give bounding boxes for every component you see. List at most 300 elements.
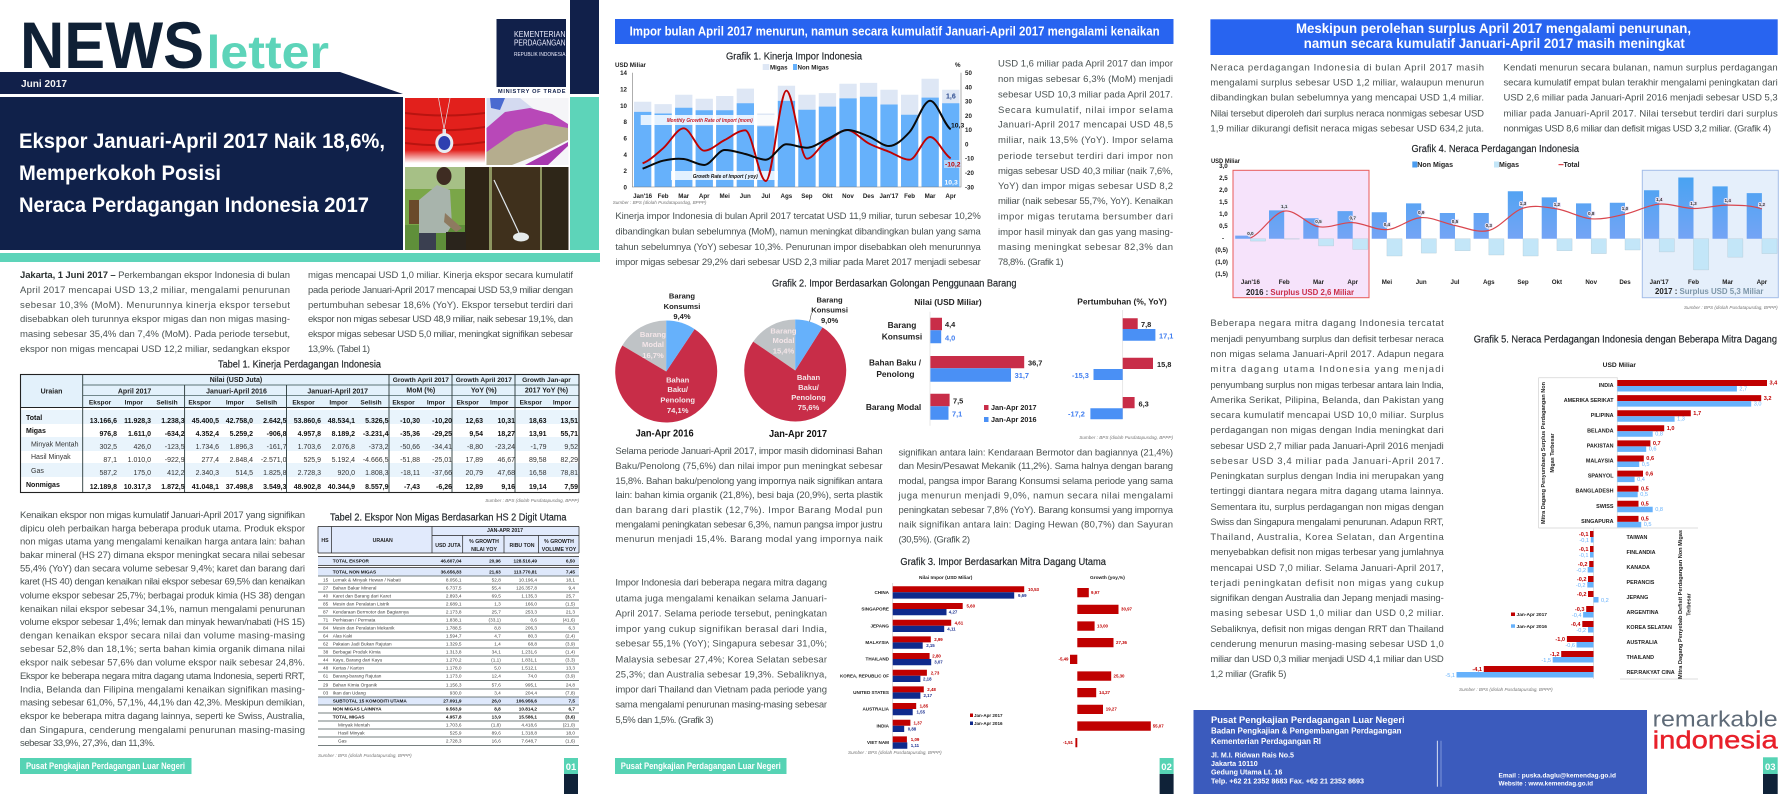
table 1 data rows: 19,14 xyxy=(529,484,547,491)
table 2 header cells: NILAI YOY xyxy=(471,547,497,553)
surplus axis title (rotated): Migas Terbesar xyxy=(1550,433,1556,473)
deficit value labels: -1,0 xyxy=(1555,637,1565,643)
chart 4 axes and legend: (1,5) xyxy=(1215,271,1228,278)
table 2 data rows: 995,1 xyxy=(525,683,537,688)
intro text columns: migas mencapai USD 1,0 miliar. Kinerja ekspor secara kumulatif xyxy=(308,270,573,281)
table 1 data rows: 5.259,2 xyxy=(230,431,253,438)
deficit value labels: -0,2 xyxy=(1576,628,1586,634)
table 2 data rows: TOTAL EKSPOR xyxy=(333,559,370,564)
chart 1 value labels: 1,6 xyxy=(946,94,956,100)
table 1 header cells: Ekspor xyxy=(188,400,211,406)
table 1 data rows: Hasil Minyak xyxy=(31,454,71,461)
contact footer panel: Pusat Pengkajian Perdagangan Luar Negeri xyxy=(1211,715,1405,726)
table 1 data rows: -51,88 xyxy=(400,457,420,464)
table 1 data rows: 12,89 xyxy=(465,484,483,491)
table 2 data rows: 44 xyxy=(323,658,329,663)
table 2 header cells: VOLUME YOY xyxy=(542,547,577,553)
remarkable indonesia logo xyxy=(1653,707,1778,755)
table 1 data rows: 17,89 xyxy=(465,457,483,464)
chart 3 country labels: JEPANG xyxy=(870,623,889,628)
table 1 data rows: 12,63 xyxy=(465,418,483,425)
table 2 data rows: 40 xyxy=(323,594,329,599)
chart 3: partners growth: 14,27 xyxy=(1099,690,1111,695)
export analysis paragraph: masing sebesar 61,0%, 57,1%, 44,1% dan 42,3%. Meskipun demikian, xyxy=(20,698,305,709)
pie chart: Jan-Apr 2017: 9,0% xyxy=(821,316,839,325)
table 2 data rows: (3,9) xyxy=(565,642,575,647)
table 1 data rows: 13,91 xyxy=(529,431,547,438)
table 2: ekspor non migas xyxy=(318,526,579,746)
chart 3 value labels: 9,69 xyxy=(1018,593,1027,598)
chart 1 axes and legend: Des xyxy=(863,193,875,200)
table 1 data rows: 1.808,3 xyxy=(365,470,389,477)
trading partner text: miliar dan USD 0,3 miliar menjadi USD 4,1 miliar dan USD xyxy=(1210,654,1444,665)
table 2 data rows: Hasil Minyak xyxy=(338,731,365,736)
page number 01: 01 xyxy=(566,762,577,773)
export analysis paragraph: kenaikan nilai ekspor sebesar 34,1%, namun mengalami penurunan xyxy=(20,604,305,615)
chart 1 source: Sumber : BPS (diolah Pusdatapusdag, BPPP) xyxy=(613,200,707,205)
chart 3 value labels: 2,15 xyxy=(926,643,935,648)
table 2 data rows: Bahan Bakar Mineral xyxy=(333,586,376,591)
trading partner text: mencapai USD 7,0 miliar. Selama Januari-April 2017, xyxy=(1210,563,1444,574)
headline banner xyxy=(0,97,403,250)
chart 5 legend: Jan-Apr 2017 xyxy=(1516,612,1547,617)
chart 3 country labels: KOREA, REPUBLIC OF xyxy=(840,673,889,678)
table 2 data rows: 930,0 xyxy=(450,691,462,696)
chart 1 axes and legend: USD Miliar xyxy=(615,62,647,69)
contact footer panel: Jakarta 10110 xyxy=(1211,761,1258,768)
chart 4: neraca perdagangan xyxy=(1211,144,1778,298)
chart 2 source: Sumber : BPS (diolah Pusdatapusdag, BPPP) xyxy=(1079,435,1173,440)
table 1 data rows: 514,5 xyxy=(235,470,253,477)
export analysis paragraph xyxy=(20,510,305,749)
chart 3 value labels: 2,73 xyxy=(931,670,940,675)
bar chart: pertumbuhan YoY: 17,1 xyxy=(1159,332,1173,340)
table 1 data rows: Migas xyxy=(26,428,46,435)
chart 3 value labels: 1,37 xyxy=(914,720,923,725)
table 2 data rows: NON MIGAS LAINNYA xyxy=(333,707,382,712)
chart 1 axes and legend: Feb xyxy=(904,193,915,200)
chart 4 axes and legend: Non Migas xyxy=(1417,162,1453,169)
deficit country labels: TAIWAN xyxy=(1626,535,1647,541)
chart 3 value labels xyxy=(908,587,1040,748)
2016 surplus caption: 2016 : Surplus USD 2,6 Miliar xyxy=(1246,287,1355,297)
surplus value labels: 0,6 xyxy=(1646,456,1654,462)
surplus value labels: 1,3 xyxy=(1677,416,1685,422)
newsletter wordmark xyxy=(20,8,329,82)
table 1 data rows: 2.848,4 xyxy=(230,457,253,464)
table 2 data rows: 9,4 xyxy=(568,586,575,591)
page 2 import text right: non migas sebesar 6,3% (MoM) menjadi xyxy=(998,74,1173,85)
table 1 header cells: Impor xyxy=(226,400,245,406)
partner text: impor yang cukup signifikan berasal dari India, xyxy=(615,624,827,635)
trading partner text: sebesar USD 3,4 miliar pada Januari-April 2017. xyxy=(1210,456,1444,467)
chart 1 axes and legend: 50 xyxy=(965,70,972,77)
table 1 data rows: 3.549,3 xyxy=(263,484,287,491)
surplus axis title (rotated) xyxy=(1541,382,1556,524)
table 1 data rows: 1.238,3 xyxy=(161,418,185,425)
surplus value labels: 0,7 xyxy=(1653,441,1661,447)
table 1 data rows: 412,2 xyxy=(167,470,185,477)
page 2 import text right: Januari-April 2017 mencapai USD 48,5 xyxy=(998,120,1173,131)
table 1 header cells: Impor xyxy=(329,400,348,406)
trading partner text xyxy=(1210,318,1445,680)
chart 1 axes and legend: 4 xyxy=(624,152,628,159)
surplus value labels: 0,5 xyxy=(1641,502,1649,508)
table 1 data rows: -6,26 xyxy=(436,484,452,491)
table 2 data rows: 10.814,2 xyxy=(519,707,537,712)
table 1 header cells: Januari-April 2016 xyxy=(206,388,267,396)
trading partner text: signifikan dengan Australia dan Jepang menjadi masing- xyxy=(1210,593,1444,604)
table 2 data rows: 25,7 xyxy=(492,610,501,615)
table 1 data rows: 18,63 xyxy=(529,418,547,425)
trading partner text: Sementara itu, surplus perdagangan non migas dengan xyxy=(1210,502,1444,513)
deficit country labels: ARGENTINA xyxy=(1626,610,1659,616)
red line: mom growth xyxy=(643,91,951,181)
deficit value labels: -0,3 xyxy=(1575,607,1584,613)
surplus text columns: dibandingkan bulan sebelumnya yang mencapai USD 1,4 miliar. xyxy=(1210,93,1484,104)
table 1 header cells: Selisih xyxy=(256,400,277,406)
table 2 header cells: USD JUTA xyxy=(435,543,461,549)
import by use text: dan Mesin/Pesawat Mekanik (11,2%). Sama halnya dengan barang xyxy=(898,461,1173,472)
chart 3 country labels: THAILAND xyxy=(866,657,890,662)
table 2 data rows: 7.648,7 xyxy=(521,739,537,744)
chart 4 axes and legend: Ags xyxy=(1483,279,1495,286)
table 1 data rows: -373,2 xyxy=(369,444,389,451)
table 1 data rows: -23,24 xyxy=(495,444,515,451)
page number 02 xyxy=(1160,758,1174,794)
bar chart: nilai USD miliar: Bahan Baku / xyxy=(869,358,922,368)
table 1 data rows: 78,81 xyxy=(560,470,578,477)
chart 4 axes and legend: Mar xyxy=(1313,279,1325,286)
pie chart: Jan-Apr 2017: Konsumsi xyxy=(811,306,848,314)
pie chart: Jan-Apr 2016: Jan-Apr 2016 xyxy=(636,428,694,440)
bar chart: nilai USD miliar: 4,4 xyxy=(945,320,956,329)
chart 3 legend: Jan-Apr 2016 xyxy=(974,721,1003,726)
trading partner text: mitra dagang utama Indonesia yang menjadi xyxy=(1210,364,1444,375)
table 2 data rows: Kendaraan Bermotor dan Bagiannya xyxy=(333,610,409,615)
2017 surplus caption: 2017 : Surplus USD 5,3 Miliar xyxy=(1655,286,1764,296)
total value labels: 0,5 xyxy=(1452,219,1459,224)
chart 4 axes and legend: Feb xyxy=(1688,279,1699,286)
chart 1 axes and legend: Apr xyxy=(945,193,957,200)
table 2 data rows: 1.231,6 xyxy=(521,650,537,655)
intro text columns: pada periode Januari-April 2017 mencapai USD 53,9 miliar dengan xyxy=(308,285,573,296)
partner text: 5,5% dan 1,5%. (Grafik 3) xyxy=(615,715,713,726)
total value labels: 0,9 xyxy=(1418,210,1425,215)
import by use text: menurun menjadi 15,4%. Barang modal yang impornya naik xyxy=(615,534,883,545)
surplus country labels: PILIPINA xyxy=(1591,413,1614,419)
page 2 import text right: YoY) dan impor migas sebesar USD 8,2 xyxy=(998,181,1173,192)
chart 1 axes and legend: Mei xyxy=(720,193,730,200)
table 2 data rows: 85 xyxy=(323,602,329,607)
table 1 data rows: 1.825,8 xyxy=(263,470,287,477)
bar chart: nilai USD miliar: Konsumsi xyxy=(882,331,922,341)
pie chart: Jan-Apr 2017: Penolong xyxy=(791,393,826,402)
bar chart: nilai USD miliar: Barang Modal xyxy=(866,402,921,412)
contact footer panel: Jl. M.I. Ridwan Rais No.5 xyxy=(1211,752,1294,760)
page number 03: 03 xyxy=(1765,762,1776,773)
chart 3 value labels: 2,80 xyxy=(932,654,941,659)
table 2 data rows: 1.594,7 xyxy=(446,634,462,639)
partner text: sebesar 55,1% (YoY); Singapura sebesar 31,0%; xyxy=(615,639,827,650)
table 1 header cells: Uraian xyxy=(41,388,62,396)
trading partner text: terjadi peningkatan defisit non migas yang cukup xyxy=(1210,578,1444,589)
table 1 header cells: Ekspor xyxy=(392,400,415,406)
trading partner text: cenderung menurun masing-masing sebesar USD 1,0 xyxy=(1210,639,1444,650)
page 2 import text left xyxy=(615,211,982,268)
export analysis paragraph: non migas utama yang mengalami kenaikan harga antara lain: bahan xyxy=(20,537,305,548)
pie chart: Jan-Apr 2017: Bahan xyxy=(797,373,820,382)
bar chart legend: Jan-Apr 2017 xyxy=(991,405,1037,412)
table 1 data rows: 8.557,9 xyxy=(365,484,389,491)
page 2 footer tag xyxy=(615,758,786,774)
chart 3 country labels: CHINA xyxy=(874,590,890,595)
table 1 data rows: 2.340,3 xyxy=(196,470,219,477)
surplus value labels: 1,0 xyxy=(1667,426,1674,432)
table 2 data rows: 525,9 xyxy=(450,731,462,736)
table 1 data rows: 89,58 xyxy=(529,457,547,464)
chart 3 value labels: 1,11 xyxy=(911,743,920,748)
table 2 data rows: 52,8 xyxy=(492,578,501,583)
chart 1 axes and legend: Jan'16 xyxy=(633,193,653,200)
table 2 data rows: (1,5) xyxy=(565,602,575,607)
table 2 data rows: 55,4 xyxy=(492,586,501,591)
table 2 data rows: Bahan Kimia Organik xyxy=(333,683,378,688)
bar chart: nilai USD miliar xyxy=(866,297,1042,426)
migas bars xyxy=(1250,239,1777,270)
intro text columns: ekspor non migas mencapai USD 12,2 miliar, sedangkan ekspor xyxy=(20,344,290,355)
contact footer panel: Website : www.kemendag.go.id xyxy=(1498,780,1593,788)
table 1 data rows: 9,52 xyxy=(564,444,578,451)
table 1 data rows: -2.571,0 xyxy=(261,457,287,464)
table 1 data rows: 1.896,3 xyxy=(230,444,253,451)
table 2 data rows: (7,8) xyxy=(565,691,575,696)
chart 5: surplus partners xyxy=(1538,362,1778,528)
total value labels: 0,5 xyxy=(1315,219,1322,224)
chart 1 axes and legend: -20 xyxy=(965,170,975,177)
surplus text columns: miliar pada Januari-April 2017. Nilai tersebut terdiri dari surplus xyxy=(1504,109,1778,120)
chart 1 axes and legend: -30 xyxy=(965,184,975,191)
chart 1: kinerja impor xyxy=(615,52,975,200)
bar chart: nilai USD miliar: 7,1 xyxy=(952,410,962,418)
chart 3: partners growth: 9,97 xyxy=(1091,590,1100,595)
trading partner text: masing sebesar USD 1,0 miliar dan USD 0,2 miliar. xyxy=(1210,608,1444,619)
table 2 data rows: (3,9) xyxy=(565,674,575,679)
deficit value labels: -5,1 xyxy=(1445,673,1455,679)
chart 3 country labels: AUSTRALIA xyxy=(862,707,890,712)
table 1 header cells: Impor xyxy=(553,400,572,406)
total value labels: 0,8 xyxy=(1588,211,1595,216)
total value labels: 1,4 xyxy=(1725,198,1731,203)
table 2 data rows: 46.607,04 xyxy=(441,559,462,564)
table 1 data rows: -161,7 xyxy=(267,444,287,451)
table 1: kinerja perdagangan xyxy=(20,374,579,492)
chart 3 value labels: 3,07 xyxy=(934,660,943,665)
table 1 data rows: 1.611,0 xyxy=(128,431,151,438)
table 2 source: Sumber : BPS (diolah Pusdatapusdag, BPPP) xyxy=(318,753,412,758)
bar chart: nilai USD miliar: Penolong xyxy=(876,369,914,379)
table 2 data rows: 16,6 xyxy=(492,739,501,744)
chart 3 value labels: 1,85 xyxy=(920,704,929,709)
table 2 header cells: URAIAN xyxy=(373,538,393,544)
table 2 data rows: 1.318,8 xyxy=(521,731,537,736)
partner text: April 2017. Selama periode tersebut, peningkatan xyxy=(615,609,827,620)
surplus text columns: Nilai tersebut diperoleh dari surplus neraca nonmigas sebesar USD xyxy=(1210,109,1484,120)
table 2 data rows: 13,9 xyxy=(492,715,501,720)
annotation box: yearly growth xyxy=(671,171,778,180)
chart 3 value labels: 10,53 xyxy=(1028,587,1040,592)
import by use text: 15,8%. Bahan baku/penolong yang impornya naik signifikan antara xyxy=(615,476,883,487)
deficit country labels xyxy=(1626,535,1675,676)
chart 1 axes and legend: 12 xyxy=(620,86,628,94)
page 1 masthead xyxy=(0,0,599,95)
photo: sapphire pendant on red fabric xyxy=(405,98,485,163)
table 1 data rows: -634,2 xyxy=(165,431,185,438)
deficit value labels: 0,2 xyxy=(1601,598,1609,604)
table 1 data rows: Gas xyxy=(31,468,44,475)
ministry logo: KEMENTERIAN xyxy=(514,30,566,39)
chart 3 value labels: 2,18 xyxy=(923,676,932,681)
table 2 data rows: (1,4) xyxy=(565,650,575,655)
table 1 data rows: 4.957,8 xyxy=(298,431,321,438)
chart 3 country labels xyxy=(840,590,890,745)
table 1 data rows: 12.189,8 xyxy=(90,484,117,491)
table 1 header cells: Ekspor xyxy=(292,400,315,406)
bar chart: nilai USD miliar: 4,0 xyxy=(945,334,955,342)
table 1 data rows: 2.642,5 xyxy=(263,418,287,425)
chart 1 axes and legend: 30 xyxy=(965,99,972,106)
table 1 data rows: 175,0 xyxy=(133,470,151,477)
total line xyxy=(1250,204,1762,238)
chart 3: partners growth: Growth (yoy,%) xyxy=(1090,575,1125,581)
table 2 data rows: 1.703,6 xyxy=(446,723,462,728)
total value labels: 1,2 xyxy=(1759,202,1766,207)
table 2 data rows: 2.689,1 xyxy=(446,602,462,607)
chart 1 axes and legend: Mar xyxy=(678,193,690,200)
pie chart: Jan-Apr 2016: Barang xyxy=(669,292,695,300)
table 2 header cells: RIBU TON xyxy=(510,543,535,549)
table 2 data rows: Kayu, Barang dari Kayu xyxy=(333,658,383,663)
surplus value labels: 3,2 xyxy=(1764,396,1771,402)
bar chart: pertumbuhan YoY xyxy=(1068,296,1173,419)
chart 3 country labels: SINGAPORE xyxy=(861,607,889,612)
pie chart: Jan-Apr 2016: 9,4% xyxy=(673,312,691,321)
deficit value labels: -0,2 xyxy=(1576,568,1586,574)
table 2 data rows: 128.516,49 xyxy=(514,559,537,564)
intro text columns: ekspor migas sebesar USD 5,0 miliar, meningkat signifikan sebesar xyxy=(308,329,573,340)
deficit country labels: THAILAND xyxy=(1626,655,1654,661)
page 2 heading: Impor bulan April 2017 menurun, namun secara kumulatif Januari-April 2017 mengalami kenaikan xyxy=(630,24,1160,38)
surplus country labels: SINGAPURA xyxy=(1581,519,1614,525)
page 1 footer tag: Pusat Pengkajian Perdagangan Luar Negeri xyxy=(26,761,185,771)
table 1 header cells: Ekspor xyxy=(520,400,542,406)
table 2 data rows: 204,4 xyxy=(525,691,537,696)
table 2 data rows: 1.173,0 xyxy=(446,674,462,679)
intro text columns: Jakarta, 1 Juni 2017 – Perkembangan ekspor Indonesia di bulan xyxy=(20,270,290,281)
table 2 data rows: 206,3 xyxy=(525,626,537,631)
surplus country labels: INDIA xyxy=(1599,383,1614,389)
chart 1 axes and legend xyxy=(615,62,975,200)
deficit value labels: -0,2 xyxy=(1578,562,1588,568)
table 1 data rows: -50,66 xyxy=(400,444,420,451)
chart 3 country labels: UNITED STATES xyxy=(853,690,889,695)
chart 4 axes and legend: Nov xyxy=(1585,279,1598,286)
page 2 import text left: tahun sebelumnya (YoY) sebesar 10,3%. Penurunan impor disebabkan oleh menurunnya xyxy=(615,242,982,253)
trading partner text: menyebabkan defisit non migas terbesar yang jumlahnya xyxy=(1210,547,1445,558)
deficit country labels: AUSTRALIA xyxy=(1626,640,1658,646)
bar chart: nilai USD miliar: Nilai (USD Miliar) xyxy=(914,297,982,307)
export analysis paragraph: volume ekspor sebesar 1,4%; lemak dan minyak hewan/nabati (HS 15) xyxy=(20,617,305,628)
page number 02: 02 xyxy=(1161,762,1172,773)
pie chart: Jan-Apr 2017: Jan-Apr 2017 xyxy=(769,429,827,440)
surplus text columns: 1,9 miliar dikurangi defisit neraca migas sebesar USD 634,2 juta. xyxy=(1210,124,1484,135)
chart 4 axes and legend: Jul xyxy=(1451,279,1460,286)
table 1 source: Sumber : BPS (diolah Pusdatapusdag, BPPP) xyxy=(485,498,579,503)
trading partner text: sebesar USD 2,7 miliar pada Januari-April 2016 menjadi xyxy=(1210,441,1444,452)
chart 1 axes and legend: Non Migas xyxy=(798,64,829,72)
chart 5 legend xyxy=(1511,612,1547,629)
ministry logo: MINISTRY OF TRADE xyxy=(498,89,566,95)
chart 4 axes and legend: Okt xyxy=(1552,279,1562,286)
intro text columns: April 2017 mencapai USD 13,2 miliar, mengalami penurunan xyxy=(20,285,290,296)
table 1 data rows: 18,27 xyxy=(497,431,515,438)
headline banner: Neraca Perdagangan Indonesia 2017 xyxy=(19,193,369,217)
table 1 data rows: -10,30 xyxy=(400,418,420,425)
surplus value labels: 0,5 xyxy=(1644,522,1651,528)
table 2 data rows: 1,4 xyxy=(494,642,501,647)
table 1 data rows: 16,58 xyxy=(529,470,547,477)
deficit value labels: -0,6 xyxy=(1565,643,1575,649)
table 2 data rows: 6.737,5 xyxy=(446,586,462,591)
table 2 data rows: 7,45 xyxy=(566,570,575,575)
intro text columns: disebabkan oleh turunnya ekspor migas dan non migas masing- xyxy=(20,314,290,325)
table 1 data rows: -123,5 xyxy=(165,444,185,451)
table 1 data rows: 8.189,2 xyxy=(332,431,355,438)
table 2 data rows: 21,3 xyxy=(566,610,575,615)
page 2 import text right: sebesar USD 10,3 miliar pada April 2017. xyxy=(998,90,1173,101)
table 1 data rows: -34,41 xyxy=(432,444,452,451)
table 1 header cells: 2017 YoY (%) xyxy=(525,388,568,394)
chart 4 axes and legend: 2,5 xyxy=(1219,175,1228,182)
trading partner text: Beberapa negara mitra dagang Indonesia tercatat xyxy=(1210,318,1444,329)
table 2 data rows: 4,7 xyxy=(494,634,501,639)
bar chart legend xyxy=(984,405,1037,424)
page 2 import text right xyxy=(998,59,1174,268)
deficit value labels: -0,1 xyxy=(1579,538,1589,544)
page number 03 xyxy=(1763,757,1778,794)
deficit country labels: KANADA xyxy=(1626,565,1650,571)
table 2 data rows: 6,3 xyxy=(568,626,575,631)
chart 4 axes and legend: Feb xyxy=(1279,279,1290,286)
table 2 data rows: (2,4) xyxy=(565,634,575,639)
deficit value labels: -0,2 xyxy=(1577,592,1586,598)
chart 3 value labels: 1,09 xyxy=(911,737,920,742)
chart 4 axes and legend: Total xyxy=(1564,162,1580,169)
chart 3 title: Grafik 3. Impor Berdasarkan Mitra Dagang Utama xyxy=(900,557,1106,568)
chart 3 country labels: MALAYSIA xyxy=(865,640,890,645)
page 2 import text right: miliar, naik 13,5% (YoY). Impor selama xyxy=(998,135,1174,146)
chart 4 axes and legend: (0,5) xyxy=(1215,247,1228,254)
table 1 title: Tabel 1. Kinerja Perdagangan Indonesia xyxy=(218,360,381,370)
import by use text: Selama periode Januari-April 2017, impor masih didominasi Bahan xyxy=(615,446,883,457)
table 1 data rows: 48.534,1 xyxy=(328,418,355,425)
date ribbon: Juni 2017 xyxy=(21,78,67,90)
chart 3 value labels: 4,61 xyxy=(955,620,964,625)
surplus country labels: SPANYOL xyxy=(1588,474,1614,480)
table 2 data rows: 71 xyxy=(323,618,329,623)
table 1 data rows: 1.734,6 xyxy=(196,444,219,451)
table 1 data rows: -35,36 xyxy=(400,431,420,438)
